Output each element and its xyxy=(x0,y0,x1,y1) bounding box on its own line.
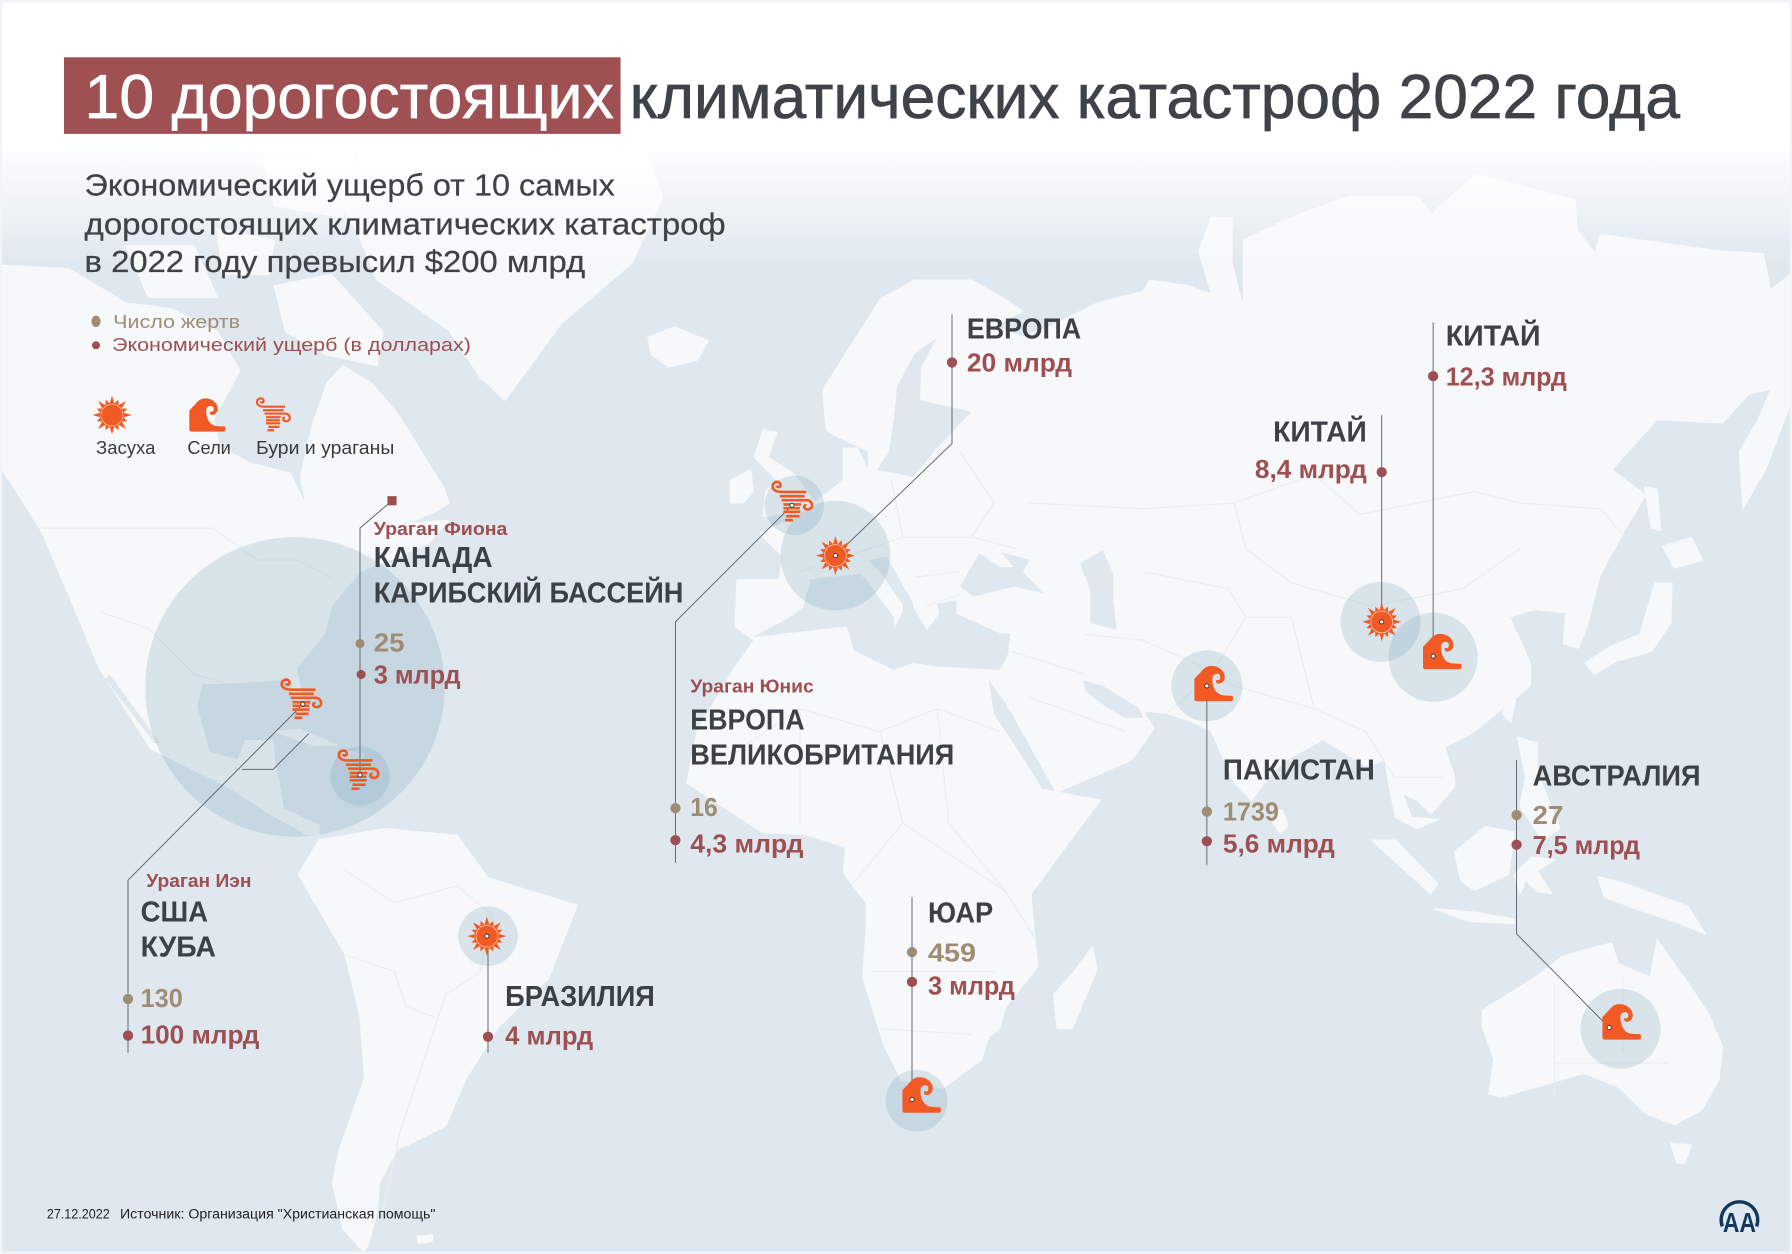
legend: disaster icons: Бури и ураганы xyxy=(256,437,394,458)
footer: date and source: 27.12.2022 xyxy=(47,1206,110,1221)
legend: data colours: Число жертв xyxy=(113,311,240,332)
callout: Europe / UK: 4,3 млрд xyxy=(690,829,804,859)
legend: disaster icons xyxy=(92,395,394,458)
callout: China drought: 8,4 млрд xyxy=(1255,454,1367,484)
subtitle text block: Экономический ущерб от 10 самых xyxy=(85,168,615,203)
callout: South Africa xyxy=(902,897,1015,1113)
callout: South Africa: 3 млрд xyxy=(928,970,1015,1000)
callout: China drought: КИТАЙ xyxy=(1273,414,1367,448)
callout: Australia: 7,5 млрд xyxy=(1533,830,1640,860)
region circles xyxy=(145,476,1661,1132)
callout: USA / Cuba: КУБА xyxy=(141,932,216,964)
callout: USA / Cuba: 100 млрд xyxy=(141,1020,260,1050)
callout: Europe / UK: Ураган Юнис xyxy=(690,676,814,697)
callout: Pakistan: 1739 xyxy=(1223,797,1279,827)
callout: Brazil: БРАЗИЛИЯ xyxy=(505,981,655,1013)
callout: Brazil xyxy=(467,917,655,1053)
callout: Australia: 27 xyxy=(1533,800,1563,830)
callout: Canada / Caribbean: КАНАДА xyxy=(374,542,493,574)
callout: Europe drought xyxy=(816,313,1081,575)
callout: Canada / Caribbean: 3 млрд xyxy=(374,660,461,690)
callout: Europe / UK xyxy=(670,482,954,863)
title: климатических катастроф 2022 года xyxy=(630,63,1681,132)
callout: China flood: КИТАЙ xyxy=(1446,318,1541,352)
map: inland seas xyxy=(105,337,1143,791)
callout: USA / Cuba: США xyxy=(141,896,208,928)
callout: Canada / Caribbean: 25 xyxy=(374,628,405,658)
callout: Australia: АВСТРАЛИЯ xyxy=(1533,760,1701,792)
title xyxy=(64,57,1681,134)
map: country borders xyxy=(41,452,1669,1212)
callout: South Africa: 459 xyxy=(928,937,976,967)
callout: Europe drought: 20 млрд xyxy=(967,348,1072,378)
top white fade xyxy=(0,0,1792,265)
callout: USA / Cuba: Ураган Иэн xyxy=(146,870,251,891)
legend: disaster icons: Засуха xyxy=(96,437,156,458)
callout: China flood xyxy=(1423,318,1567,669)
subtitle text block: в 2022 году превысил $200 млрд xyxy=(85,244,585,279)
callout: USA / Cuba xyxy=(123,680,321,1053)
legend: data colours xyxy=(91,311,471,355)
callout: Pakistan: 5,6 млрд xyxy=(1223,829,1335,859)
callout: Canada / Caribbean: Ураган Фиона xyxy=(374,518,508,539)
callout: Brazil: 4 млрд xyxy=(505,1021,593,1051)
subtitle text block xyxy=(85,168,726,279)
callout: Canada / Caribbean xyxy=(339,496,683,789)
legend: data colours: Экономический ущерб (в долларах) xyxy=(112,334,471,355)
logo: AA: AA xyxy=(1723,1207,1756,1238)
callout: China drought xyxy=(1255,414,1401,641)
footer: date and source: Источник: Организация "Христианская помощь" xyxy=(120,1206,436,1221)
callout: Europe / UK: ЕВРОПА xyxy=(690,704,805,736)
callout: USA / Cuba: 130 xyxy=(141,983,183,1013)
callout: Europe / UK: 16 xyxy=(690,792,718,822)
callout: Australia xyxy=(1511,760,1701,1040)
callout: Pakistan xyxy=(1194,666,1375,865)
callout: Canada / Caribbean: КАРИБСКИЙ БАССЕЙН xyxy=(374,575,683,609)
callout: Europe drought: ЕВРОПА xyxy=(967,313,1081,345)
callout: South Africa: ЮАР xyxy=(928,897,993,929)
subtitle text block: дорогостоящих климатических катастроф xyxy=(85,206,726,241)
callout: Europe / UK: ВЕЛИКОБРИТАНИЯ xyxy=(690,740,954,772)
callout: Pakistan: ПАКИСТАН xyxy=(1223,755,1375,787)
legend: disaster icons: Сели xyxy=(187,437,231,458)
callout: China flood: 12,3 млрд xyxy=(1446,361,1567,391)
title: 10 дорогостоящих xyxy=(85,63,614,132)
